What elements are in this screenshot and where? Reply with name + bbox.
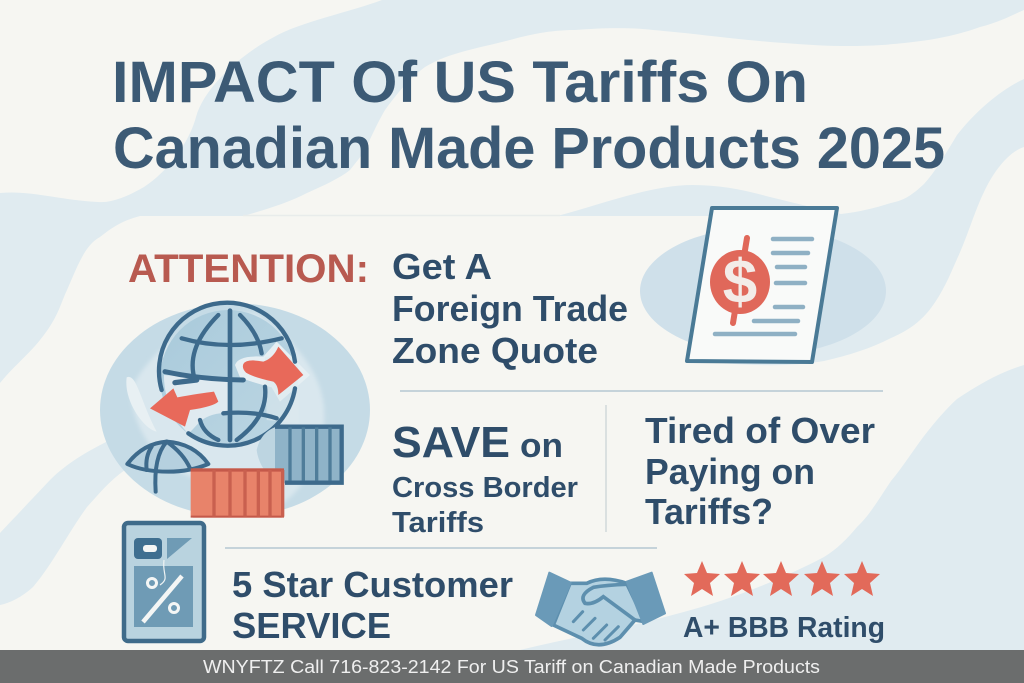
text block: tired of over paying on tariffs: Paying on — [645, 451, 815, 492]
icon: calculator with percent — [124, 523, 204, 641]
text block: get a foreign trade zone quote — [392, 246, 628, 371]
icon: red arrow right — [243, 347, 303, 395]
attention label: ATTENTION: — [128, 247, 369, 291]
icon: handshake — [536, 573, 665, 645]
text block: save on cross border tariffs: Tariffs — [392, 507, 484, 539]
icon: right cuff — [627, 573, 665, 624]
text block: get a foreign trade zone quote: Zone Quote — [392, 330, 598, 371]
text block: save on cross border tariffs — [392, 418, 578, 539]
text block: 5 star customer service: 5 Star Customer — [232, 564, 513, 605]
footer bar — [0, 650, 1024, 683]
text block: tired of over paying on tariffs — [645, 410, 875, 532]
text block: get a foreign trade zone quote: Foreign Trade — [392, 288, 628, 329]
text block: 5 star customer service: SERVICE — [232, 605, 391, 646]
text block: tired of over paying on tariffs: Tariffs? — [645, 491, 773, 532]
icon: invoice document with dollar sign — [640, 208, 886, 362]
text block: save on cross border tariffs: on — [520, 427, 563, 465]
text block: get a foreign trade zone quote: Get A — [392, 246, 492, 287]
icon: five rating stars — [684, 561, 880, 596]
footer bar: WNYFTZ Call 716-823-2142 For US Tariff on Canadian Made Products — [203, 657, 820, 677]
icon: left cuff — [536, 573, 571, 626]
text block: save on cross border tariffs: Cross Border — [392, 472, 578, 504]
icon: red container — [191, 468, 284, 518]
icon: red arrow left — [150, 388, 218, 427]
icon: small globe umbrella — [127, 442, 208, 492]
title — [112, 50, 945, 181]
icon: blue container — [257, 427, 342, 483]
text block: tired of over paying on tariffs: Tired of Over — [645, 410, 875, 451]
icon: invoice document with dollar sign: $ — [723, 248, 757, 317]
text block: 5 star customer service — [232, 564, 513, 646]
title: Canadian Made Products 2025 — [113, 116, 945, 181]
text block: save on cross border tariffs: SAVE — [392, 418, 510, 467]
rating label: A+ BBB Rating — [683, 612, 885, 644]
title: IMPACT Of US Tariffs On — [112, 50, 808, 115]
icon: globe with trade arrows, umbrella and containers — [100, 303, 370, 518]
